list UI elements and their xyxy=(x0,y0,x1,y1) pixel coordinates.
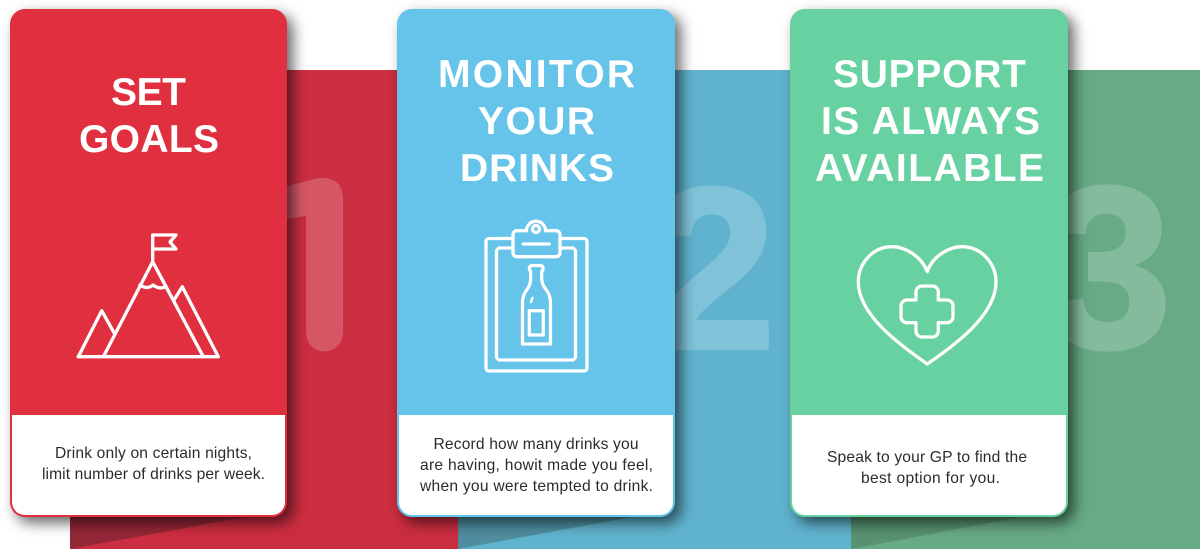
heading: support is always available: IS ALWAYS xyxy=(821,100,1040,143)
heading: set goals xyxy=(79,71,219,161)
background band: blue xyxy=(458,70,851,549)
text: support description: Speak to your GP to find the xyxy=(827,449,1027,466)
text: set goals description xyxy=(42,445,265,483)
heading: set goals: GOALS xyxy=(79,118,219,161)
text: monitor description: when you were tempted to drink. xyxy=(419,478,653,495)
text: monitor description: are having, howit made you feel, xyxy=(420,457,653,474)
number 1: 1 xyxy=(250,132,383,400)
panel: monitor your drinks xyxy=(397,9,675,517)
text: support description: best option for you. xyxy=(861,470,1000,487)
panel: set goals xyxy=(10,9,287,517)
heading: support is always available: AVAILABLE xyxy=(815,147,1044,190)
icon: mountain with flag xyxy=(78,235,218,357)
heading: monitor your drinks: DRINKS xyxy=(460,147,614,190)
heading: support is always available: SUPPORT xyxy=(833,53,1026,96)
panel: support is always available xyxy=(790,9,1068,517)
text: set goals description: Drink only on certain nights, xyxy=(55,445,252,462)
heading: set goals: SET xyxy=(111,71,186,114)
icon: clipboard with bottle xyxy=(486,221,587,371)
heading: monitor your drinks xyxy=(438,53,635,190)
number 2: 2 xyxy=(648,140,776,397)
background band: green xyxy=(851,70,1200,549)
background band: red xyxy=(70,70,458,549)
text: monitor description xyxy=(419,436,653,495)
text: monitor description: Record how many drinks you xyxy=(434,436,638,453)
text: support description xyxy=(827,449,1027,487)
number 3: 3 xyxy=(1044,139,1172,396)
heading: support is always available xyxy=(815,53,1044,190)
icon: heart with medical cross xyxy=(858,247,996,364)
heading: monitor your drinks: YOUR xyxy=(478,100,595,143)
text: set goals description: limit number of drinks per week. xyxy=(42,466,265,483)
heading: monitor your drinks: MONITOR xyxy=(438,53,635,96)
